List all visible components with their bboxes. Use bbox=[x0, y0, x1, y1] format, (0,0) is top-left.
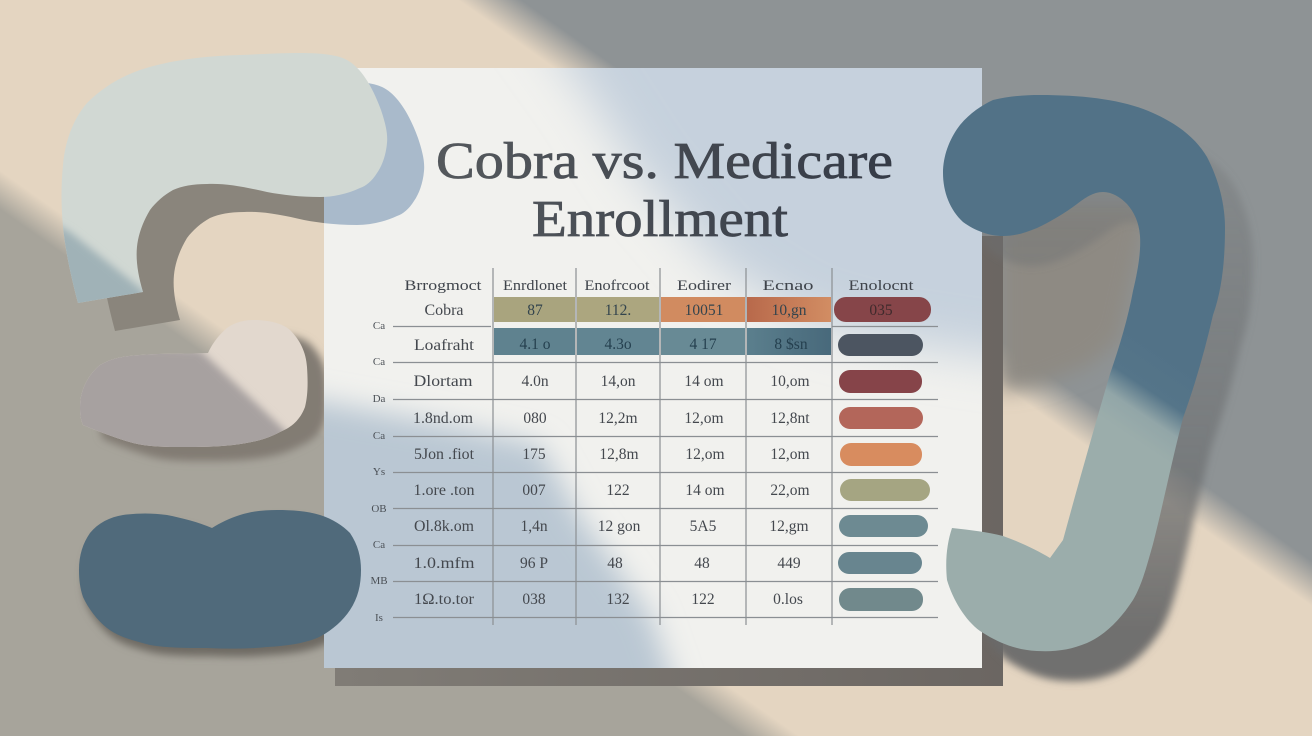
table rows text: 12 gon bbox=[598, 518, 641, 535]
table rows text: Ol.8k.om bbox=[414, 518, 474, 535]
wall shadow: blue shape bbox=[83, 518, 365, 657]
row side labels: Ca bbox=[373, 539, 385, 551]
table rows text: 007 bbox=[522, 482, 546, 499]
status pills bbox=[834, 297, 931, 611]
row side labels: Da bbox=[373, 393, 386, 405]
table rows text: 12,om bbox=[770, 446, 810, 463]
table rows text: Cobra bbox=[424, 302, 464, 319]
title bbox=[436, 133, 893, 248]
table rows text: 4 17 bbox=[689, 336, 717, 353]
table rows text: 12,8m bbox=[599, 446, 639, 463]
table rows text: 080 bbox=[523, 410, 547, 427]
table rows text: 1,4n bbox=[520, 518, 548, 535]
table rows text: 96 P bbox=[520, 555, 548, 572]
row side labels: Ca bbox=[373, 430, 385, 442]
table rows text: 132 bbox=[606, 591, 630, 608]
highlighted cells: row 1 bbox=[494, 297, 831, 322]
row side labels: OB bbox=[371, 503, 387, 515]
table rows text: 12,om bbox=[685, 446, 725, 463]
table rows text: Dlortam bbox=[414, 373, 472, 390]
table rows text: 12,om bbox=[684, 410, 724, 427]
wall shadow: green shape bbox=[98, 81, 424, 331]
panel: enrollment sheet bbox=[324, 68, 982, 668]
table rows text: 4.1 o bbox=[520, 336, 551, 353]
table rows text: 175 bbox=[522, 446, 546, 463]
table rows text: 48 bbox=[607, 555, 623, 572]
table rows text: 14 om bbox=[685, 482, 725, 499]
wall shadow: right shape bbox=[971, 125, 1253, 681]
table rows text: 10,gn bbox=[772, 302, 807, 319]
table rows text: 122 bbox=[606, 482, 630, 499]
table rows text: 10,om bbox=[770, 373, 810, 390]
table rows text: 1.8nd.om bbox=[413, 410, 473, 427]
table header: Enofrcoot bbox=[584, 278, 650, 294]
table rows text: 449 bbox=[777, 555, 801, 572]
table rows text bbox=[413, 302, 893, 608]
title: Cobra vs. Medicare bbox=[436, 133, 893, 190]
table rows text: 48 bbox=[694, 555, 710, 572]
table rows text: 4.3o bbox=[604, 336, 632, 353]
table rows text: 12,2m bbox=[598, 410, 638, 427]
row side labels: Ca bbox=[373, 320, 385, 332]
table rows text: 22,om bbox=[770, 482, 810, 499]
shape: sage green hook bbox=[62, 53, 388, 303]
table rows text: 12,8nt bbox=[770, 410, 810, 427]
table header: Brrogmoct bbox=[404, 278, 482, 294]
table rows text: 1.0.mfm bbox=[414, 555, 474, 572]
shape: slate blue blob bbox=[79, 510, 361, 649]
table rows text: 0.los bbox=[773, 591, 803, 608]
table rows text: 122 bbox=[691, 591, 715, 608]
table rows text: 112. bbox=[605, 302, 631, 319]
table header: Eodirer bbox=[677, 278, 731, 294]
row side labels: Ca bbox=[373, 356, 385, 368]
table grid bbox=[393, 268, 938, 625]
shape: taupe blob bbox=[80, 320, 308, 447]
table rows text: 8 $sn bbox=[774, 336, 808, 353]
table rows text: Loafraht bbox=[414, 337, 475, 354]
table rows text: 5A5 bbox=[690, 518, 717, 535]
title: Enrollment bbox=[532, 191, 789, 248]
row side labels: MB bbox=[370, 575, 388, 587]
table rows text: 5Jon .fiot bbox=[414, 446, 475, 463]
table rows text: 038 bbox=[522, 591, 546, 608]
table rows text: 87 bbox=[527, 302, 543, 319]
wall shadow: card bbox=[335, 236, 1003, 686]
table rows text: 1Ω.to.tor bbox=[414, 591, 475, 608]
table rows text: 035 bbox=[869, 302, 893, 319]
shape: right blue hook bbox=[943, 95, 1225, 651]
row side labels: Is bbox=[375, 612, 383, 624]
table header: Enrdlonet bbox=[503, 278, 567, 294]
row side labels bbox=[370, 320, 388, 624]
shadow of the green shape on the sheet bbox=[324, 83, 424, 225]
table rows text: 14,on bbox=[601, 373, 636, 390]
table header: Ecnao bbox=[762, 278, 814, 294]
table rows text: 10051 bbox=[685, 302, 723, 319]
wall shadow: taupe shape bbox=[100, 334, 328, 461]
highlighted cells: row 2 bbox=[494, 328, 831, 355]
table header: Enolocnt bbox=[848, 278, 914, 294]
table rows text: 14 om bbox=[684, 373, 724, 390]
row side labels: Ys bbox=[373, 466, 385, 478]
table header bbox=[404, 278, 914, 294]
table rows text: 1.ore .ton bbox=[414, 482, 475, 499]
table rows text: 12,gm bbox=[769, 518, 809, 535]
table rows text: 4.0n bbox=[521, 373, 549, 390]
